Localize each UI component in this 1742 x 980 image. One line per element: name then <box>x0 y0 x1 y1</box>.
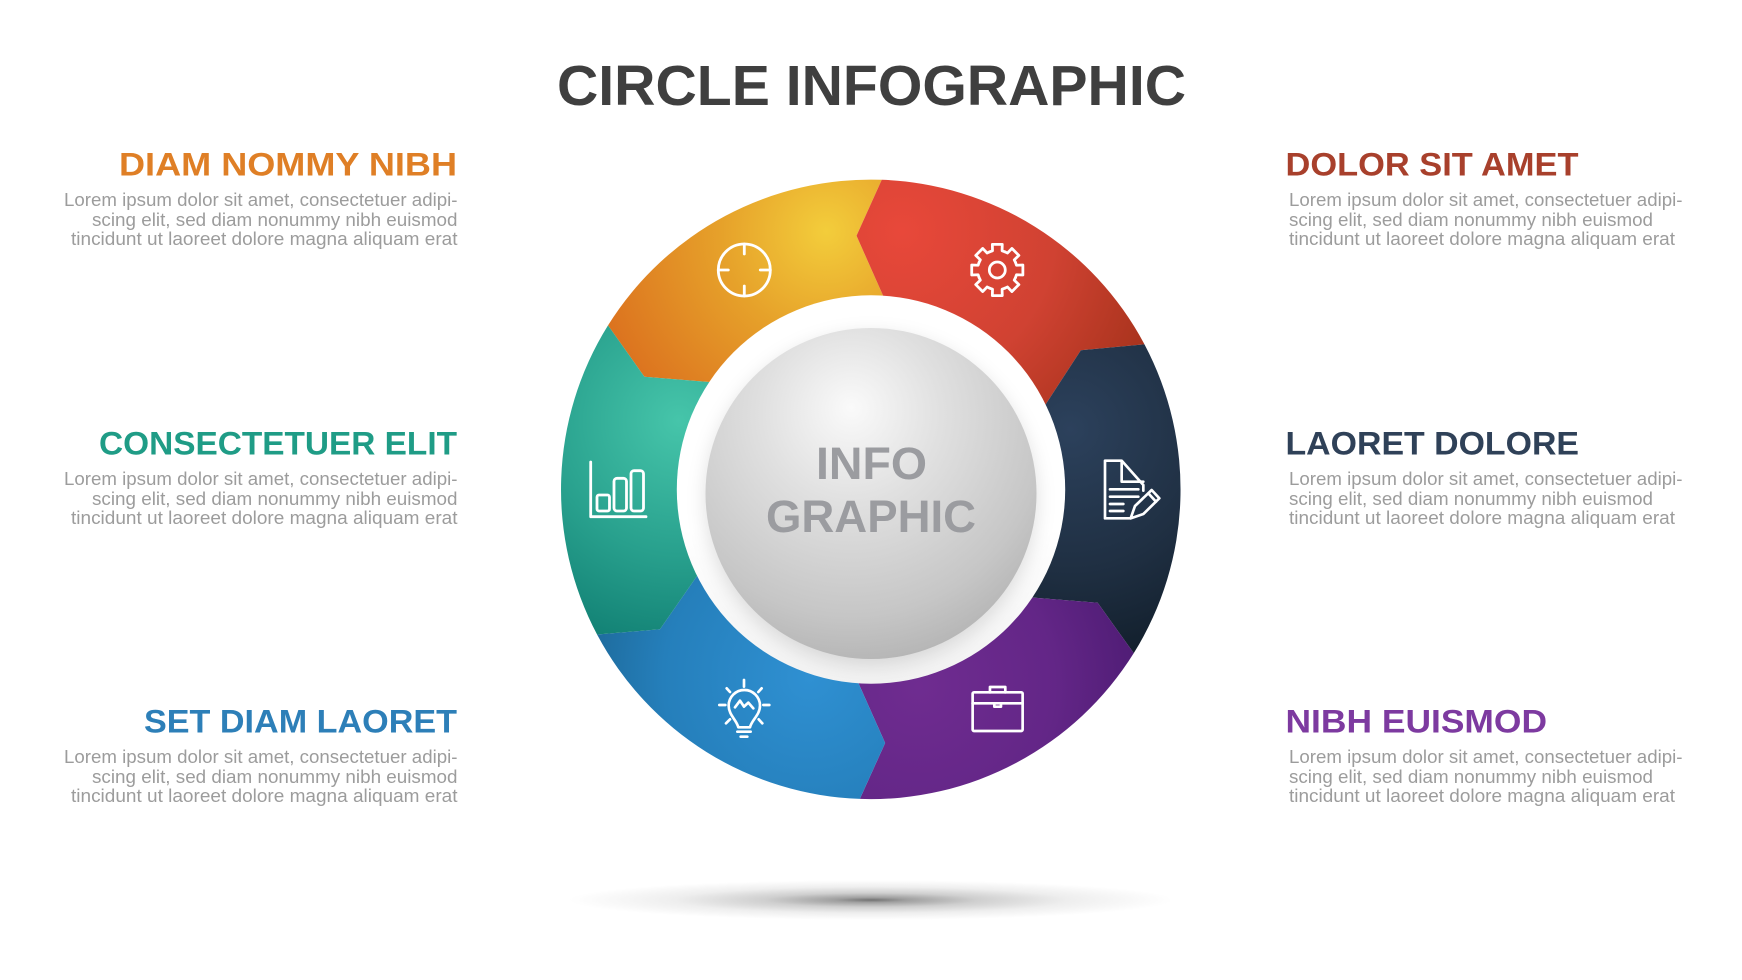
panel: nibh euismod: scing elit, sed diam nonummy nibh euismod <box>1289 766 1653 787</box>
panel: laoret dolore <box>1286 426 1682 528</box>
center label <box>766 438 976 542</box>
panel: nibh euismod: Lorem ipsum dolor sit amet, consectetuer adipi- <box>1289 746 1682 767</box>
panel: consectetuer elit: Lorem ipsum dolor sit amet, consectetuer adipi- <box>64 468 458 489</box>
panel: nibh euismod: NIBH EUISMOD <box>1286 704 1547 740</box>
panel: set diam laoret: scing elit, sed diam nonummy nibh euismod <box>92 766 458 787</box>
panel: diam nommy nibh <box>64 146 458 249</box>
panel: laoret dolore: scing elit, sed diam nonummy nibh euismod <box>1289 488 1653 509</box>
segment: navy <box>1024 344 1181 653</box>
panel: consectetuer elit <box>64 426 458 528</box>
panel: diam nommy nibh: Lorem ipsum dolor sit amet, consectetuer adipi- <box>64 189 458 210</box>
center label: INFO <box>816 438 927 489</box>
segment: red <box>857 180 1144 412</box>
panel: set diam laoret <box>64 704 458 806</box>
panel: diam nommy nibh: DIAM NOMMY NIBH <box>119 146 457 182</box>
segment: teal <box>561 325 717 634</box>
icon: light bulb <box>719 680 769 737</box>
center label: GRAPHIC <box>766 491 976 542</box>
panel: consectetuer elit: CONSECTETUER ELIT <box>99 426 457 462</box>
segment: blue <box>597 569 885 799</box>
panel: laoret dolore: tincidunt ut laoreet dolore magna aliquam erat <box>1289 507 1675 528</box>
icon: gear <box>972 244 1023 296</box>
panel: laoret dolore: Lorem ipsum dolor sit amet, consectetuer adipi- <box>1289 468 1682 489</box>
ring chart <box>561 180 1181 799</box>
icon: bar chart <box>591 462 646 517</box>
panel: dolor sit amet: Lorem ipsum dolor sit amet, consectetuer adipi- <box>1289 189 1682 210</box>
panel: nibh euismod <box>1286 704 1682 806</box>
panel: consectetuer elit: scing elit, sed diam nonummy nibh euismod <box>92 488 458 509</box>
center ball <box>706 328 1036 659</box>
panel: set diam laoret: Lorem ipsum dolor sit amet, consectetuer adipi- <box>64 746 458 767</box>
segment: purple <box>856 597 1134 799</box>
panel: laoret dolore: LAORET DOLORE <box>1286 426 1579 462</box>
center hole <box>677 295 1065 684</box>
panel: diam nommy nibh: scing elit, sed diam nonummy nibh euismod <box>92 209 458 230</box>
panel: set diam laoret: tincidunt ut laoreet dolore magna aliquam erat <box>71 785 458 806</box>
panel: set diam laoret: SET DIAM LAORET <box>144 704 457 740</box>
icon: crosshair <box>718 244 770 296</box>
panel: consectetuer elit: tincidunt ut laoreet dolore magna aliquam erat <box>71 507 458 528</box>
segment: orange <box>608 180 886 383</box>
panel: diam nommy nibh: tincidunt ut laoreet dolore magna aliquam erat <box>71 228 458 249</box>
icon: document and pencil <box>1105 461 1159 518</box>
panel: dolor sit amet: DOLOR SIT AMET <box>1286 146 1579 182</box>
panel: nibh euismod: tincidunt ut laoreet dolore magna aliquam erat <box>1289 785 1675 806</box>
ball shadow <box>705 334 1037 666</box>
title: CIRCLE INFOGRAPHIC <box>557 54 1186 118</box>
panel: dolor sit amet: tincidunt ut laoreet dolore magna aliquam erat <box>1289 228 1675 249</box>
panel: dolor sit amet <box>1286 146 1682 249</box>
icon: briefcase <box>973 687 1023 731</box>
panel: dolor sit amet: scing elit, sed diam nonummy nibh euismod <box>1289 209 1653 230</box>
ground shadow <box>569 880 1173 920</box>
